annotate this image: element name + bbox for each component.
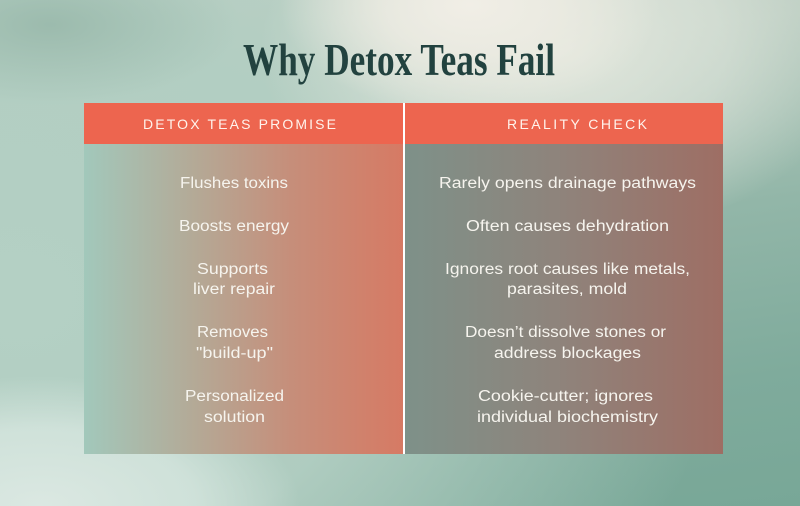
- reality list: individual biochemistry: [477, 409, 658, 426]
- reality list: parasites, mold: [507, 281, 627, 298]
- column body: promise: [84, 144, 403, 454]
- promise list: Personalized: [185, 388, 284, 405]
- header: detox teas promise: DETOX TEAS PROMISE: [143, 116, 336, 132]
- promise list: Removes: [197, 324, 268, 341]
- promise list: Flushes toxins: [180, 175, 288, 192]
- promise list: liver repair: [193, 281, 275, 298]
- reality list: address blockages: [494, 345, 641, 362]
- reality list: [439, 175, 696, 426]
- header: detox teas promise: [84, 103, 403, 144]
- reality list: Doesn’t dissolve stones or: [465, 324, 666, 341]
- promise list: Boosts energy: [179, 218, 289, 235]
- reality list: Ignores root causes like metals,: [445, 261, 690, 278]
- reality list: Cookie-cutter; ignores: [478, 388, 653, 405]
- promise list: [179, 175, 289, 426]
- promise list: "build-up": [196, 345, 273, 362]
- panel: reality check: [405, 103, 723, 454]
- header: reality check: [405, 103, 723, 144]
- reality list: Often causes dehydration: [466, 218, 669, 235]
- header: reality check: REALITY CHECK: [507, 116, 648, 132]
- reality list: Rarely opens drainage pathways: [439, 175, 696, 192]
- promise list: solution: [204, 409, 265, 426]
- column body: reality: [405, 144, 723, 454]
- promise list: Supports: [197, 261, 268, 278]
- panel: detox teas promise: [84, 103, 403, 454]
- title: Why Detox Teas Fail: [243, 35, 555, 85]
